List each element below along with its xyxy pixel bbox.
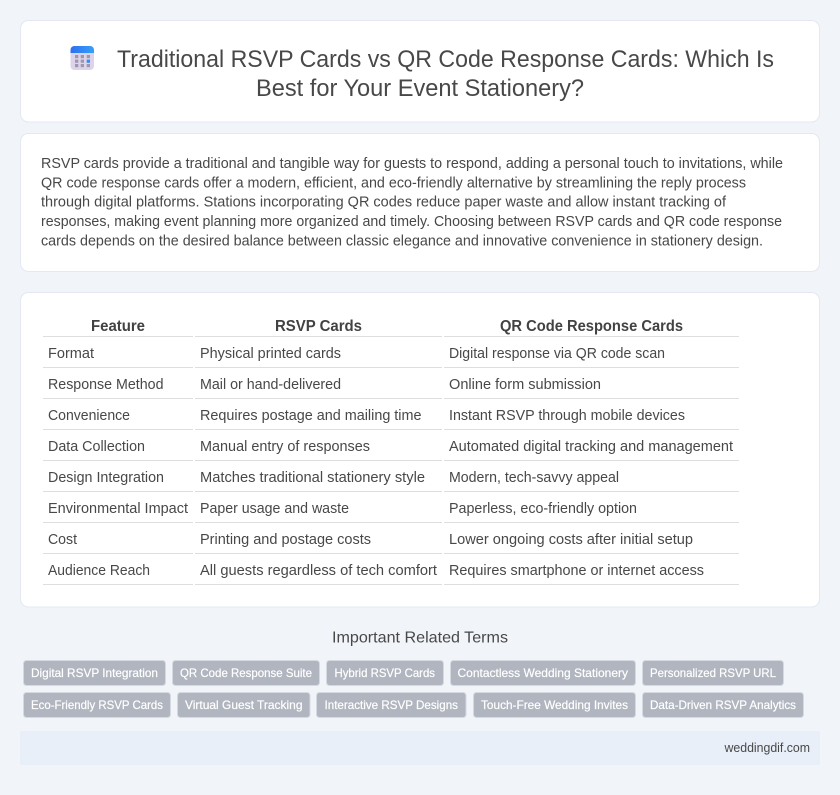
table row: Response Method: Response Method: [48, 377, 164, 393]
table row: Audience Reach: Requires smartphone or internet access: [449, 563, 704, 579]
table row: Data Collection: Automated digital tracking and management: [449, 439, 733, 455]
table header: Feature: [91, 318, 145, 335]
tag: [474, 692, 636, 718]
table row: Environmental Impact: Environmental Impact: [48, 501, 188, 517]
panel: introduction text: RSVP cards provide a traditional and tangible way for guests to respond, adding a personal touch to invitations, while: [41, 156, 783, 172]
tag: Eco-Friendly RSVP Cards: [31, 698, 163, 712]
table row: Response Method: [48, 377, 601, 393]
tag: Interactive RSVP Designs: [324, 698, 458, 712]
tag: QR Code Response Suite: [180, 666, 312, 680]
table header: [91, 318, 683, 335]
table row: Convenience: Requires postage and mailing time: [200, 408, 422, 424]
table row: Format: Physical printed cards: [200, 346, 341, 362]
table row: Environmental Impact: [48, 501, 637, 517]
tag: [316, 692, 466, 718]
tag: Data-Driven RSVP Analytics: [650, 698, 796, 712]
panel: introduction text: responses, making event planning more organized and timely. Choosing between RSVP cards and QR code response: [41, 214, 782, 230]
table row: Environmental Impact: Paperless, eco-friendly option: [449, 501, 637, 517]
table row: Response Method: Online form submission: [449, 377, 601, 393]
tag: [326, 660, 444, 686]
tag: Virtual Guest Tracking: [185, 698, 302, 712]
table row: Convenience: Convenience: [48, 408, 130, 424]
panel: comparison table: [20, 292, 820, 607]
heading: important related terms: Important Related Terms: [332, 630, 508, 646]
table row: Response Method: Mail or hand-delivered: [200, 377, 341, 393]
title: Traditional RSVP Cards vs QR Code Response Cards: Which Is: [117, 46, 774, 73]
tag: [450, 660, 636, 686]
panel: introduction text: QR code response cards offer a modern, efficient, and eco-friendly alternative by streamlining the reply process: [41, 176, 746, 192]
tag: Hybrid RSVP Cards: [334, 666, 435, 680]
table row: Cost: Printing and postage costs: [200, 532, 371, 548]
table row: Design Integration: [48, 470, 619, 486]
table row: Data Collection: Manual entry of responses: [200, 439, 370, 455]
table row: Audience Reach: [48, 563, 704, 579]
tag: [24, 660, 166, 686]
tag: [24, 692, 170, 718]
tag: Contactless Wedding Stationery: [458, 666, 628, 680]
tag: Touch-Free Wedding Invites: [481, 698, 628, 712]
table row: Format: [48, 346, 665, 362]
table row: Audience Reach: All guests regardless of tech comfort: [200, 563, 437, 579]
table row: Format: Digital response via QR code scan: [449, 346, 665, 362]
title: Best for Your Event Stationery?: [256, 75, 584, 102]
panel: introduction text: [20, 134, 820, 272]
tag: Digital RSVP Integration: [31, 666, 158, 680]
table row: Convenience: Instant RSVP through mobile devices: [449, 408, 685, 424]
table row: Format: Format: [48, 346, 94, 362]
footer: weddingdif.com: [724, 740, 810, 755]
table row: Environmental Impact: Paper usage and waste: [200, 501, 349, 517]
tag: [642, 692, 804, 718]
panel: introduction text: cards depends on the desired balance between classic elegance and innovative convenience in stationery design.: [41, 234, 763, 250]
footer: [20, 731, 820, 765]
table row: Cost: Cost: [48, 532, 77, 548]
table row: Design Integration: Design Integration: [48, 470, 164, 486]
title: [117, 46, 774, 102]
table row: Data Collection: Data Collection: [48, 439, 145, 455]
table row: Cost: Lower ongoing costs after initial setup: [449, 532, 693, 548]
tag: [642, 660, 784, 686]
table row: Cost: [48, 532, 693, 548]
tag: [172, 660, 320, 686]
table row: Design Integration: Matches traditional stationery style: [200, 470, 425, 486]
tag list: related terms: [24, 660, 804, 718]
table row: Convenience: [48, 408, 685, 424]
panel: header: [20, 20, 820, 122]
tag: [178, 692, 310, 718]
table row: Audience Reach: Audience Reach: [48, 563, 150, 579]
table header: RSVP Cards: [275, 318, 362, 335]
icon: calendar: [70, 46, 94, 70]
tag: Personalized RSVP URL: [650, 666, 776, 680]
table row: Design Integration: Modern, tech-savvy appeal: [449, 470, 619, 486]
table header: QR Code Response Cards: [500, 318, 683, 335]
table row: Data Collection: [48, 439, 733, 455]
panel: introduction text: through digital platforms. Stations incorporating QR codes reduce paper waste and allow instant tracking of: [41, 194, 727, 210]
